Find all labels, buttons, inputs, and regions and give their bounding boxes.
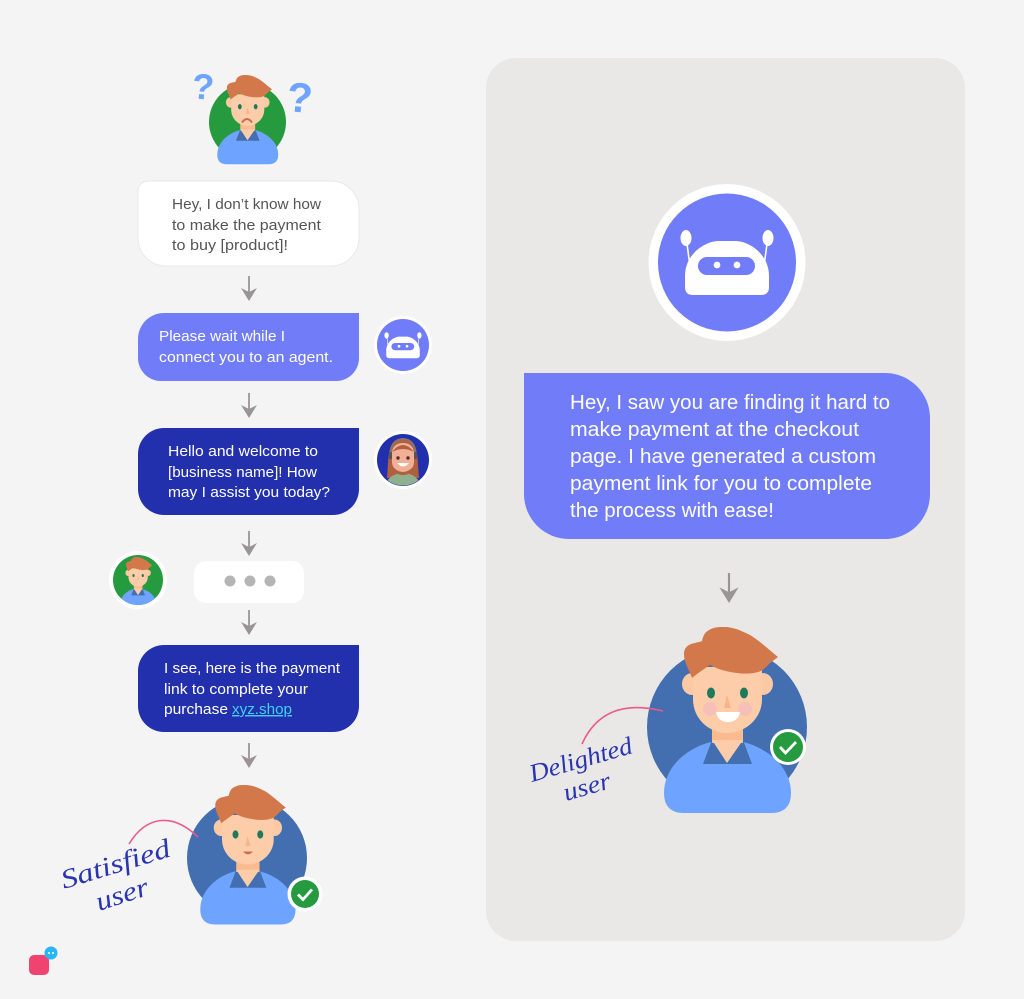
bubble: agent payment link: purchase — [164, 702, 228, 718]
bubble: agent welcome: may I assist you today? — [168, 485, 330, 501]
callout: delighted user label: user — [560, 768, 614, 807]
arrow — [241, 276, 257, 301]
bubble: bot custom payment link: make payment at the checkout — [570, 419, 859, 441]
bubble: agent payment link: xyz.shop — [232, 702, 292, 718]
bubble: agent payment link: link to complete your — [164, 682, 308, 698]
icon: satisfied user — [187, 785, 322, 924]
icon: small user avatar — [109, 551, 167, 609]
bubble: user question — [138, 181, 359, 266]
arrow — [241, 610, 257, 635]
panel: chatbot flow — [486, 58, 965, 941]
bubble: agent welcome: Hello and welcome to — [168, 444, 318, 460]
callout: satisfied user label — [57, 820, 198, 917]
bubble: user question: to buy [product]! — [172, 238, 288, 254]
icon: confused user — [190, 65, 315, 164]
bubble: agent payment link: I see, here is the payment — [164, 661, 340, 677]
callout: delighted user label — [525, 708, 663, 807]
bubble: user question: Hey, I don’t know how — [172, 197, 322, 213]
icon: logo — [29, 946, 58, 975]
bubble: agent welcome — [138, 428, 359, 515]
icon: confused user: ? — [285, 73, 315, 122]
arrow — [241, 531, 257, 556]
icon: delighted user — [647, 627, 807, 813]
bubble: bot custom payment link: payment link for you to complete — [570, 473, 872, 495]
bubble: bot wait message — [138, 313, 359, 381]
bubble: agent payment link — [138, 645, 359, 732]
callout: satisfied user label: user — [92, 871, 153, 917]
bubble: bot wait message: connect you to an agent. — [159, 350, 333, 366]
callout: satisfied user label: Satisfied — [57, 833, 174, 895]
arrow — [719, 573, 739, 603]
icon: large bot avatar — [648, 184, 806, 341]
icon: small bot avatar — [374, 316, 432, 374]
bubble: bot custom payment link: Hey, I saw you are finding it hard to — [570, 392, 890, 414]
callout: delighted user label: Delighted — [525, 732, 636, 788]
arrow — [241, 743, 257, 768]
icon: confused user: ? — [190, 65, 216, 108]
bubble: bot wait message: Please wait while I — [159, 329, 285, 345]
bubble: bot custom payment link: the process with ease! — [570, 500, 774, 522]
bubble: user question: to make the payment — [172, 218, 321, 234]
bubble: bot custom payment link: page. I have generated a custom — [570, 446, 876, 468]
arrow — [241, 393, 257, 418]
bubble: typing indicator — [194, 561, 304, 603]
bubble: bot custom payment link — [524, 373, 930, 539]
bubble: agent welcome: [business name]! How — [168, 465, 318, 481]
icon: agent avatar — [374, 431, 432, 489]
